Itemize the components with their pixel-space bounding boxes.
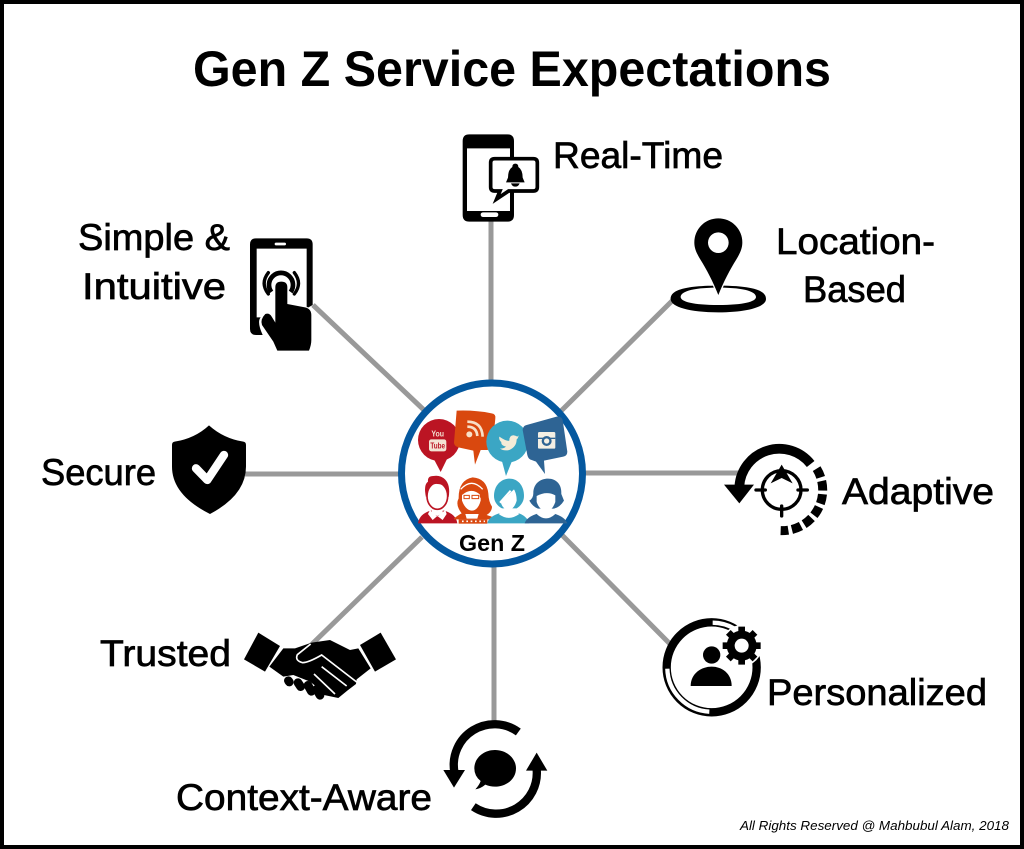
label: Location-Based: Location- <box>776 221 935 262</box>
bubble: Instagram <box>523 417 567 474</box>
title: Gen Z Service Expectations <box>193 41 831 97</box>
label: Simple & Intuitive: Simple & <box>78 217 230 258</box>
person: teal woman <box>487 479 529 523</box>
bubble: YouTube: You <box>431 429 444 439</box>
label: Simple & Intuitive <box>78 217 230 307</box>
label: Simple & Intuitive: Intuitive <box>82 266 226 307</box>
hub label: Gen Z: Gen Z <box>459 530 525 556</box>
label: Trusted: Trusted <box>100 633 231 674</box>
bubble: YouTube <box>418 419 460 472</box>
label: Adaptive: Adaptive <box>842 471 994 512</box>
copyright credit: All Rights Reserved @ Mahbubul Alam, 2018 <box>739 818 1010 833</box>
bubble: Twitter <box>486 421 528 476</box>
person: orange woman <box>454 477 492 524</box>
label: Real-Time: Real-Time <box>553 135 723 176</box>
hub: Gen Z circle <box>402 383 582 564</box>
icon: adaptive compass <box>724 449 823 531</box>
social bubbles and people <box>418 411 567 524</box>
bubble: RSS <box>454 411 495 465</box>
icon: location pin <box>671 218 766 312</box>
person: blue woman <box>525 479 567 523</box>
icon: touch phone <box>250 238 313 351</box>
icon: phone with notification <box>463 134 537 222</box>
label: Location-Based: Based <box>803 269 906 310</box>
label: Location-Based <box>776 221 935 310</box>
spokes connecting the hub to each expectation <box>245 220 745 727</box>
icon: personalized profile with gear <box>667 622 762 712</box>
label: Context-Aware: Context-Aware <box>176 777 432 818</box>
icon: handshake <box>244 633 396 698</box>
icon: context chat with rotating arrows <box>443 724 547 814</box>
label: Secure: Secure <box>41 452 156 493</box>
person: red man <box>418 476 457 523</box>
icon: shield with check <box>172 425 246 514</box>
label: Personalized: Personalized <box>767 672 987 713</box>
bubble: YouTube: Tube <box>430 442 445 451</box>
